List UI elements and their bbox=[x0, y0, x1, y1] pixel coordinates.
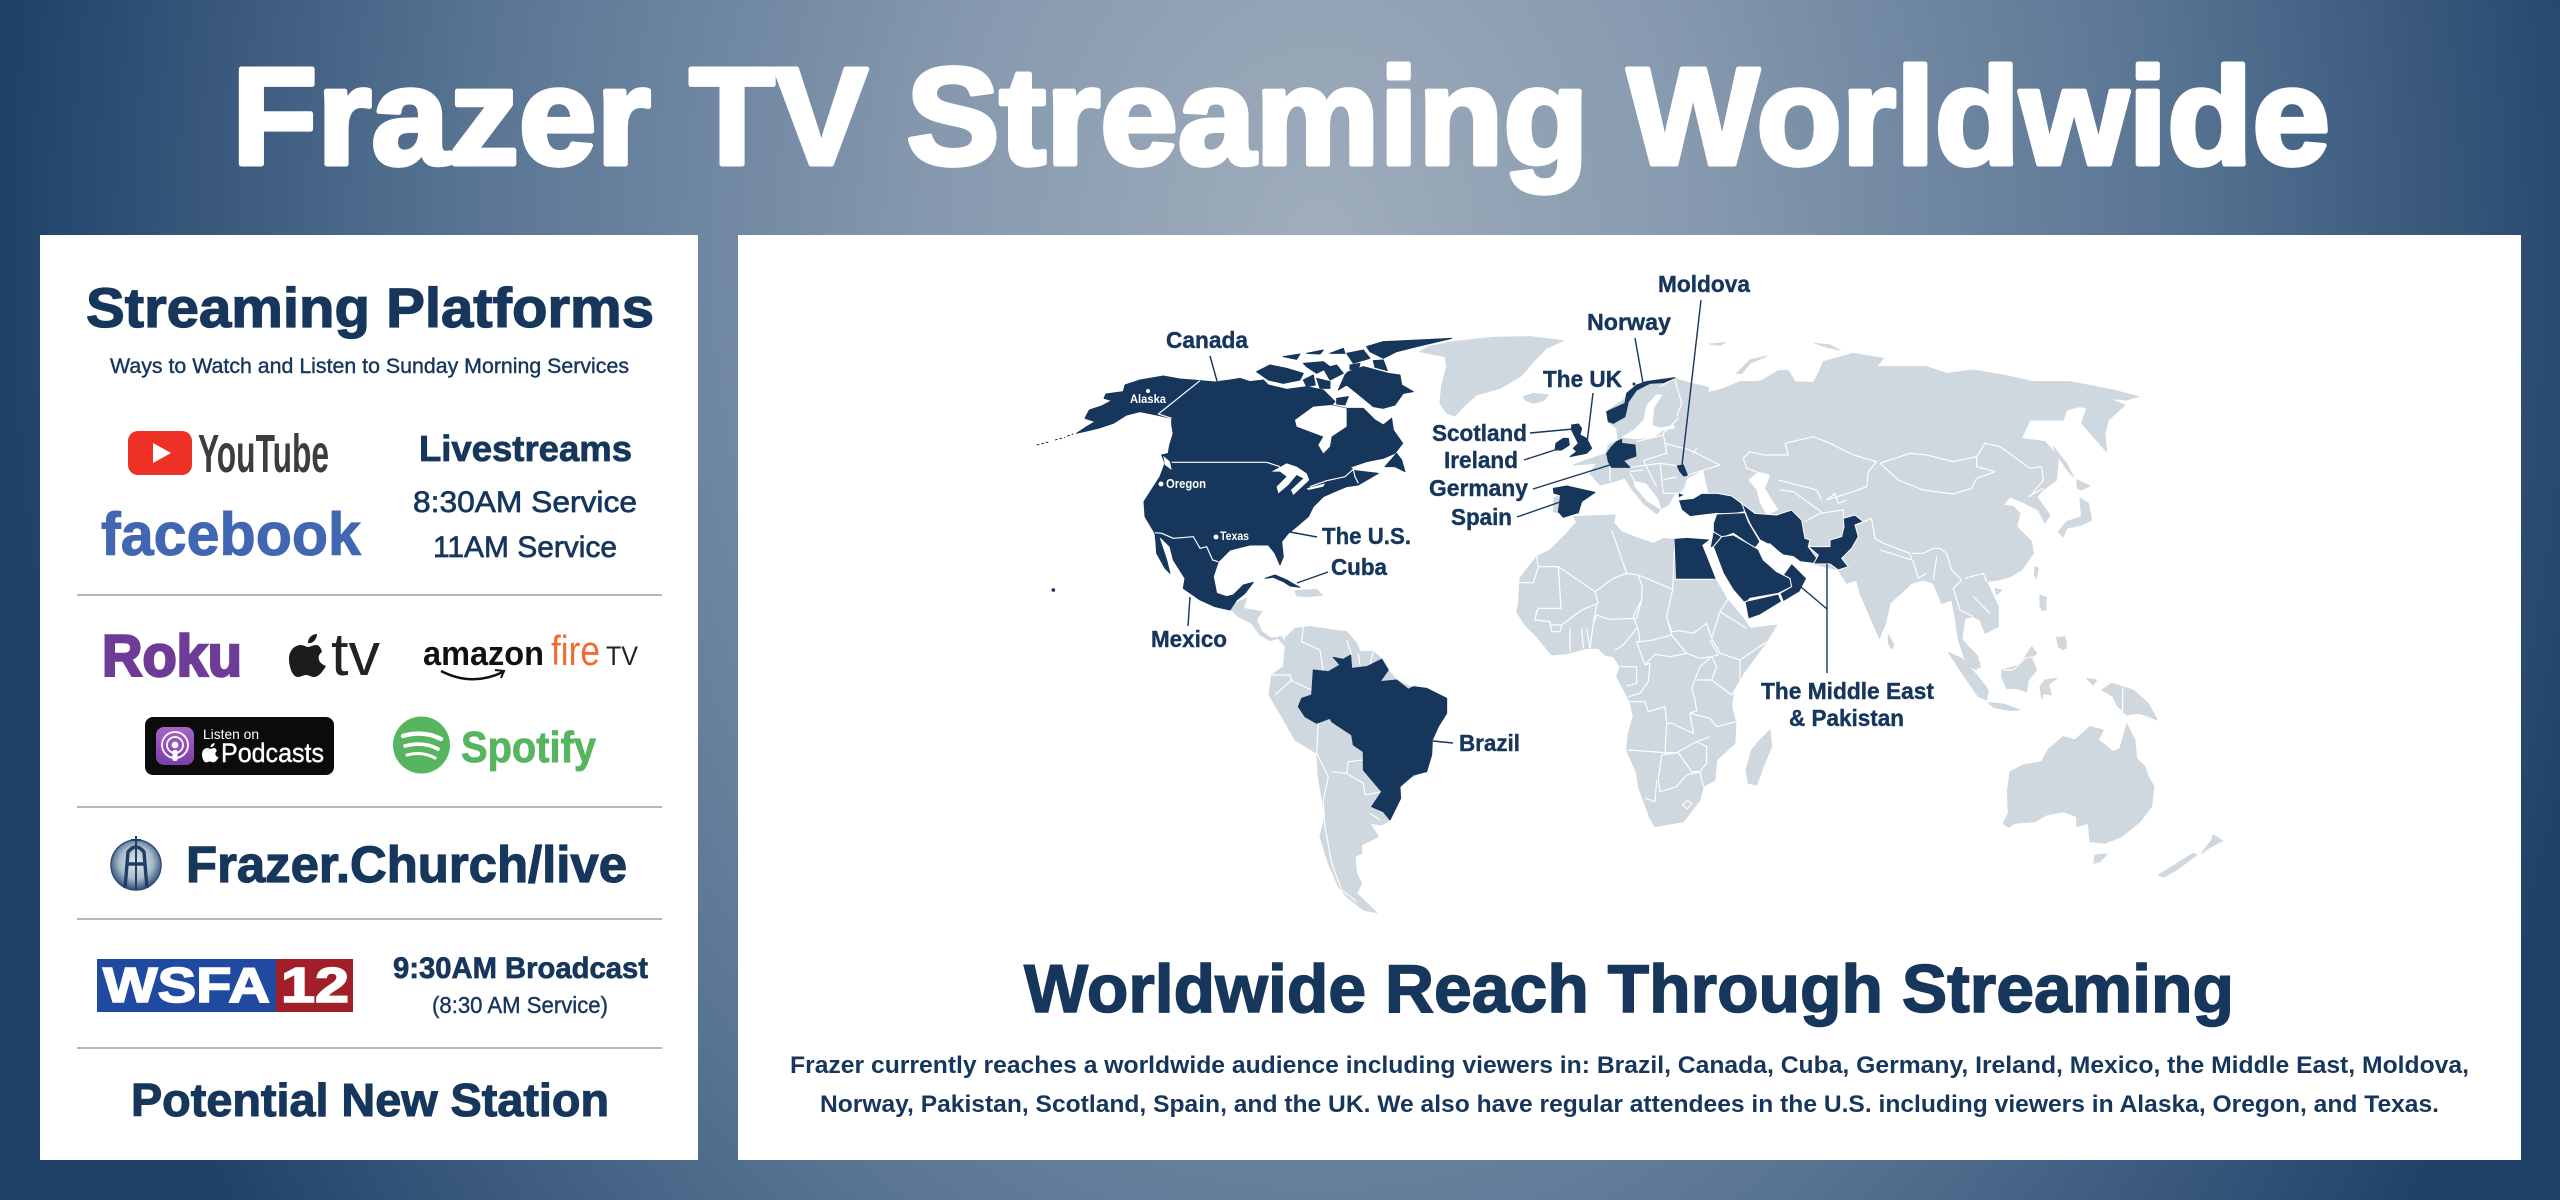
BC fjords bbox=[1162, 418, 1173, 470]
livestream times: Livestreams bbox=[419, 428, 632, 469]
state labels: Oregon bbox=[1166, 476, 1206, 491]
country labels: Moldova bbox=[1658, 271, 1750, 297]
icon: Apple TV logo: tv bbox=[331, 621, 380, 688]
Hudson Bay bbox=[1295, 405, 1347, 453]
country labels: The U.S. bbox=[1322, 523, 1411, 549]
map: North America highlighted bbox=[1037, 338, 1452, 610]
icon: Roku logo: Roku bbox=[102, 624, 242, 689]
icon: YouTube logo: YouTube bbox=[198, 424, 329, 484]
icon: WSFA 12 logo bbox=[97, 959, 353, 1013]
world map bbox=[1037, 271, 2223, 913]
icon: Apple Podcasts badge bbox=[145, 717, 334, 775]
icon: Amazon Fire TV logo: TV bbox=[606, 641, 638, 671]
state labels: Texas bbox=[1220, 529, 1249, 543]
icon: Facebook wordmark: facebook bbox=[101, 501, 362, 568]
country labels: Mexico bbox=[1151, 626, 1227, 652]
broadcast times: (8:30 AM Service) bbox=[432, 992, 608, 1018]
icon: YouTube logo bbox=[128, 424, 329, 484]
Baja California bbox=[1155, 534, 1170, 573]
icon: Amazon Fire TV logo: fire bbox=[551, 627, 600, 674]
icon: Spotify logo bbox=[393, 716, 596, 774]
country labels: The UK bbox=[1543, 366, 1622, 392]
Great Lakes bbox=[1272, 463, 1325, 495]
Cuba bbox=[1265, 575, 1300, 587]
country labels: Ireland bbox=[1444, 447, 1518, 473]
state labels bbox=[1130, 389, 1249, 543]
Central America and Caribbean bbox=[1230, 589, 1323, 650]
panel: streaming platforms bbox=[40, 235, 698, 1160]
broadcast times: 9:30AM Broadcast bbox=[393, 952, 648, 985]
Baltic bbox=[1621, 394, 1675, 439]
livestream times: 8:30AM Service bbox=[413, 486, 637, 519]
link: Frazer.Church/live: Frazer.Church/live bbox=[186, 836, 627, 893]
country labels: Canada bbox=[1166, 327, 1248, 353]
Europe bbox=[1573, 377, 1823, 517]
Aleutians bbox=[1037, 434, 1073, 445]
country labels: Scotland bbox=[1432, 420, 1527, 446]
country labels: Cuba bbox=[1331, 554, 1387, 580]
state labels: Alaska bbox=[1130, 392, 1166, 406]
paragraph: audience description: Frazer currently reaches a worldwide audience including viewers in: Brazil, Canada, Cuba, Germany, Ireland, Mexico, the Middle East, Moldova, bbox=[790, 1052, 2469, 1079]
country labels: Brazil bbox=[1459, 730, 1520, 756]
South America bbox=[1269, 627, 1447, 913]
map: Pakistan highlight bbox=[1808, 515, 1863, 570]
icon: Amazon Fire TV logo bbox=[423, 627, 638, 679]
icon: Apple Podcasts badge: Listen on bbox=[203, 726, 259, 742]
Persian Gulf bbox=[1760, 543, 1795, 570]
Oceania and island Asia bbox=[1948, 595, 2223, 877]
borders bbox=[1155, 381, 1358, 562]
paragraph: audience description bbox=[790, 1052, 2469, 1118]
icon: Frazer church logo bbox=[111, 836, 161, 890]
heading: worldwide reach through streaming: Worldwide Reach Through Streaming bbox=[1024, 951, 2234, 1027]
Asia bbox=[1687, 353, 2138, 670]
Hawaii bbox=[1052, 589, 1055, 591]
country labels: The Middle East bbox=[1761, 678, 1934, 704]
Europe borders bbox=[1610, 378, 1720, 493]
text: potential new station: Potential New Station bbox=[131, 1074, 609, 1126]
icon: Apple Podcasts badge: Podcasts bbox=[221, 738, 324, 768]
icon: Spotify logo: Spotify bbox=[461, 723, 596, 772]
subtitle: Ways to Watch and Listen to Sunday Morning Services bbox=[110, 355, 629, 378]
icon: WSFA 12 logo: WSFA bbox=[103, 959, 270, 1013]
map: Europe and Middle East highlights bbox=[1553, 378, 1818, 619]
Arctic islands bbox=[1257, 338, 1452, 472]
leader lines bbox=[1188, 300, 1827, 743]
livestream times bbox=[413, 428, 637, 564]
livestream times: 11AM Service bbox=[433, 531, 617, 564]
Caspian bbox=[1748, 472, 1778, 515]
Africa bbox=[1517, 515, 1777, 827]
country labels: & Pakistan bbox=[1789, 705, 1904, 731]
paragraph: audience description: Norway, Pakistan, Scotland, Spain, and the UK. We also have regular attendees in the U.S. including viewers in Alaska, Oregon, and Texas. bbox=[820, 1091, 2439, 1118]
icon: WSFA 12 logo: 12 bbox=[281, 959, 349, 1013]
map: South America highlight (Brazil) bbox=[1298, 655, 1447, 820]
panel: worldwide reach bbox=[738, 235, 2521, 1160]
country labels: Germany bbox=[1429, 475, 1528, 501]
icon: Amazon Fire TV logo: amazon bbox=[423, 635, 544, 673]
Portugal bbox=[1553, 495, 1561, 513]
broadcast times bbox=[393, 952, 648, 1018]
country labels: Spain bbox=[1451, 504, 1512, 530]
icon: Apple TV logo bbox=[289, 621, 380, 688]
Asia borders bbox=[1743, 437, 2043, 617]
title: Frazer TV Streaming Worldwide bbox=[232, 40, 2330, 194]
heading: streaming platforms: Streaming Platforms bbox=[86, 276, 654, 339]
country labels: Norway bbox=[1587, 309, 1671, 335]
map: grey landmasses bbox=[1230, 337, 2223, 913]
country labels bbox=[1151, 271, 1934, 756]
